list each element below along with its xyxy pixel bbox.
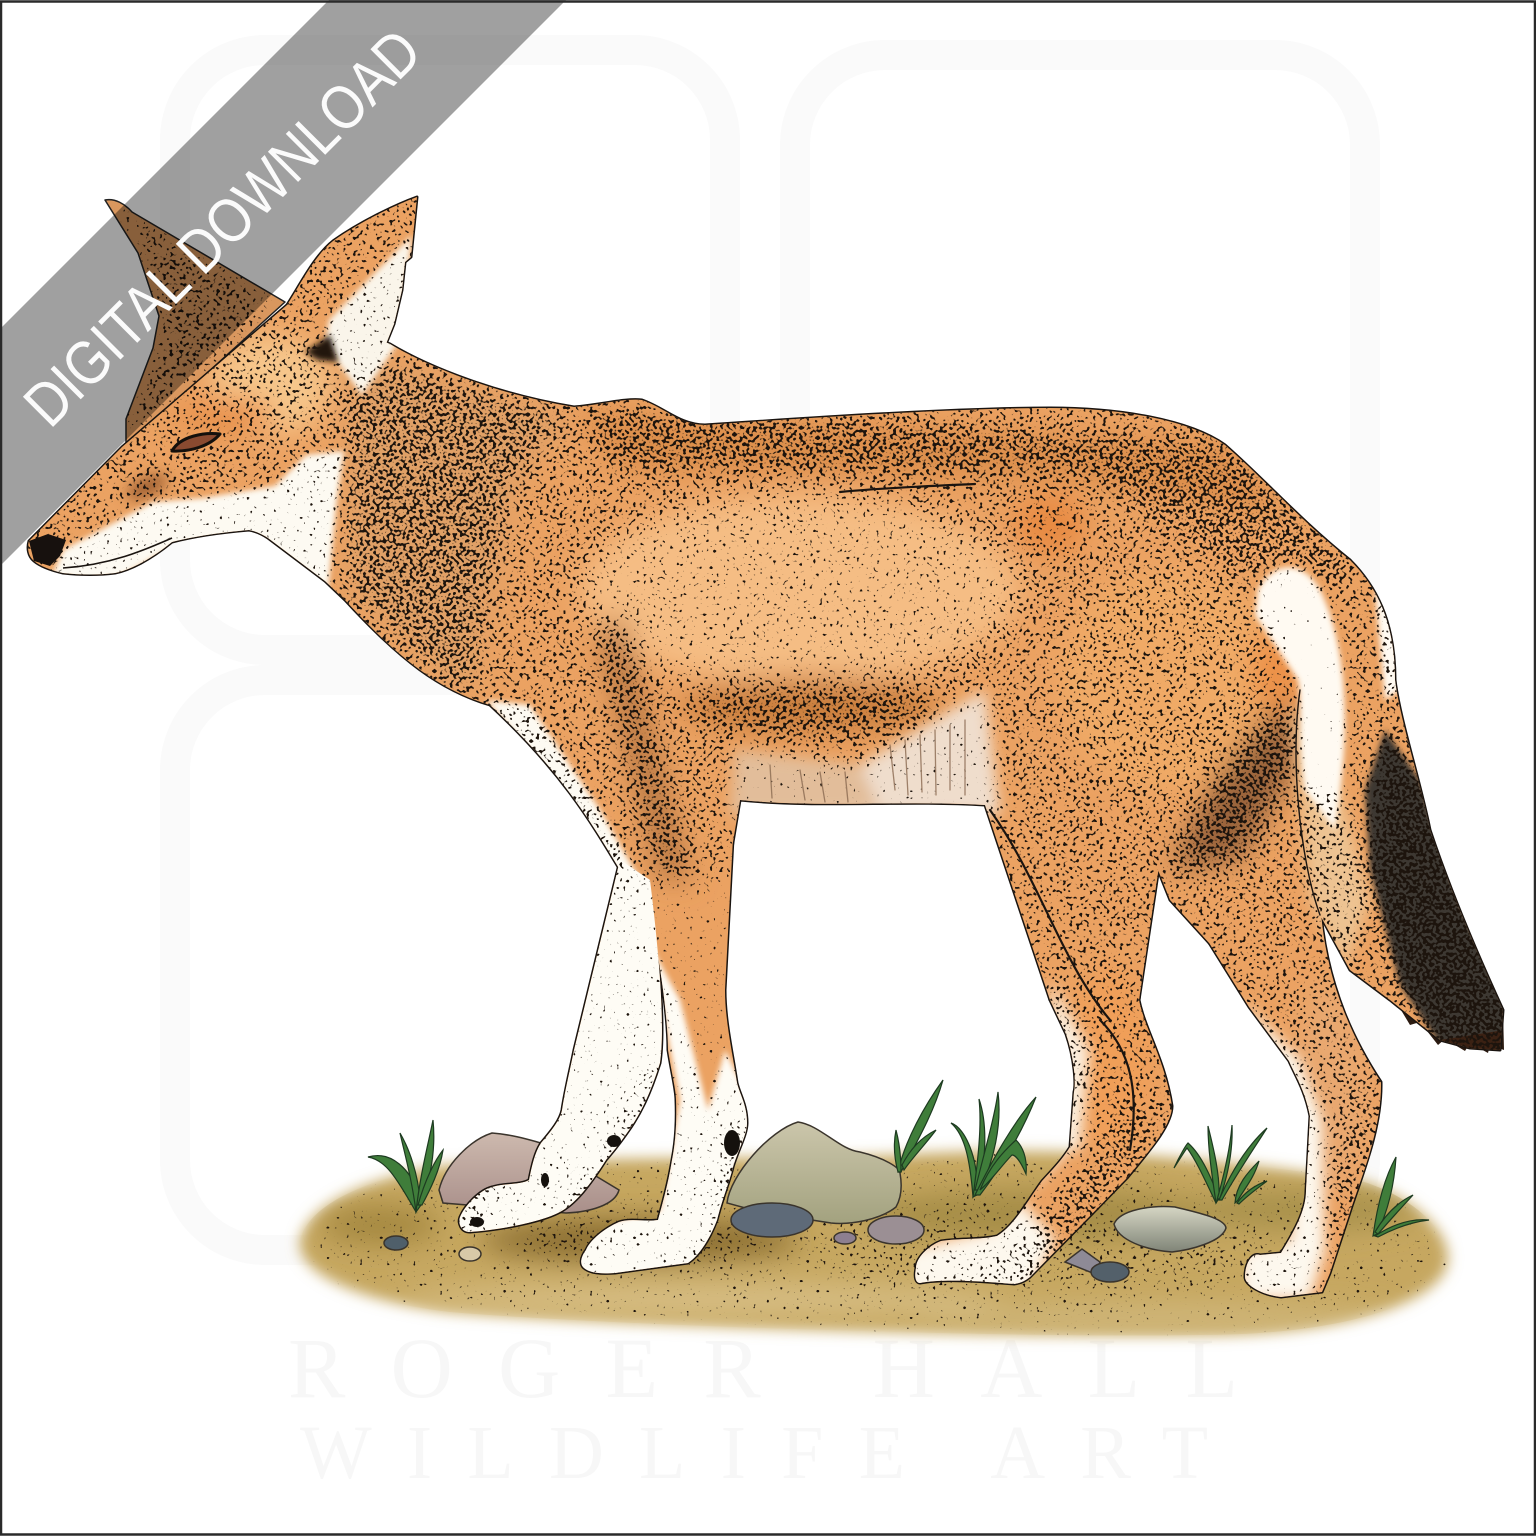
wolf: ear shadow: [305, 335, 338, 362]
neck shading: [345, 350, 570, 700]
muzzle brown marks: [123, 470, 171, 504]
wolf: outline of tail and shoulder detail: [840, 484, 1320, 1150]
watermark text: [288, 1320, 1238, 1495]
wolf illustration: [0, 180, 1536, 1310]
tail pale: [1290, 700, 1370, 970]
grass tuft 4: [1174, 1125, 1267, 1204]
front leg B white: [570, 945, 760, 1290]
rocks: [384, 1122, 1226, 1282]
throat white: [50, 451, 344, 590]
ground patch: [300, 1151, 1448, 1335]
wolf: hair lines on belly: [770, 720, 965, 802]
grass tuft 3: [951, 1092, 1036, 1197]
shoulder stripes: [600, 610, 690, 880]
wolf: silhouette outline: [28, 197, 1503, 1297]
rock: pink: [439, 1133, 619, 1213]
thigh colour: [1085, 595, 1266, 786]
hind right leg pale: [1240, 1000, 1325, 1300]
wolf: far ear: [105, 200, 285, 447]
lower leg orange: [1068, 970, 1152, 1150]
wolf: eye: [172, 434, 220, 451]
watermark text: WILDLIFE ART: [300, 1411, 1208, 1495]
wolf: mouth line: [63, 538, 172, 568]
rock: oval: [1114, 1207, 1226, 1252]
watermark: [175, 50, 1365, 1495]
wolf: stipple dots: [0, 180, 1536, 1310]
hind left foot: [915, 1146, 1073, 1284]
wolf: nose: [29, 534, 66, 566]
ear inner white: [325, 235, 412, 395]
hind left leg pale: [1050, 980, 1090, 1150]
grass tuft 2: [894, 1080, 943, 1172]
rock: blue stone: [731, 1203, 813, 1237]
grass tuft 5: [1373, 1157, 1429, 1237]
watermark text: ROGER HALL: [288, 1320, 1238, 1416]
banner: digital download: [0, 0, 566, 566]
wolf: tail hair tip: [1395, 1000, 1504, 1053]
front leg A white: [459, 860, 662, 1232]
watermark logo frames: [175, 50, 1365, 1250]
grass tuft 1: [368, 1120, 443, 1212]
rock: pebbles: [384, 1216, 1129, 1282]
wolf: coat colouring: [0, 180, 1536, 1310]
belly shadow: [680, 677, 940, 733]
grass tufts: [368, 1080, 1429, 1237]
tail white patch: [1255, 567, 1345, 830]
tail tip brown: [1440, 1030, 1505, 1056]
ground stipple: [300, 1151, 1448, 1335]
tail black tip: [1365, 730, 1510, 1060]
chest white: [486, 700, 640, 890]
wolf: paw marks: [470, 1130, 740, 1227]
back shading: [574, 410, 1290, 520]
flank highlight: [580, 495, 1020, 685]
banner ribbon: [0, 0, 566, 566]
rock: grey green: [727, 1122, 901, 1223]
belly underside: [828, 686, 1008, 824]
